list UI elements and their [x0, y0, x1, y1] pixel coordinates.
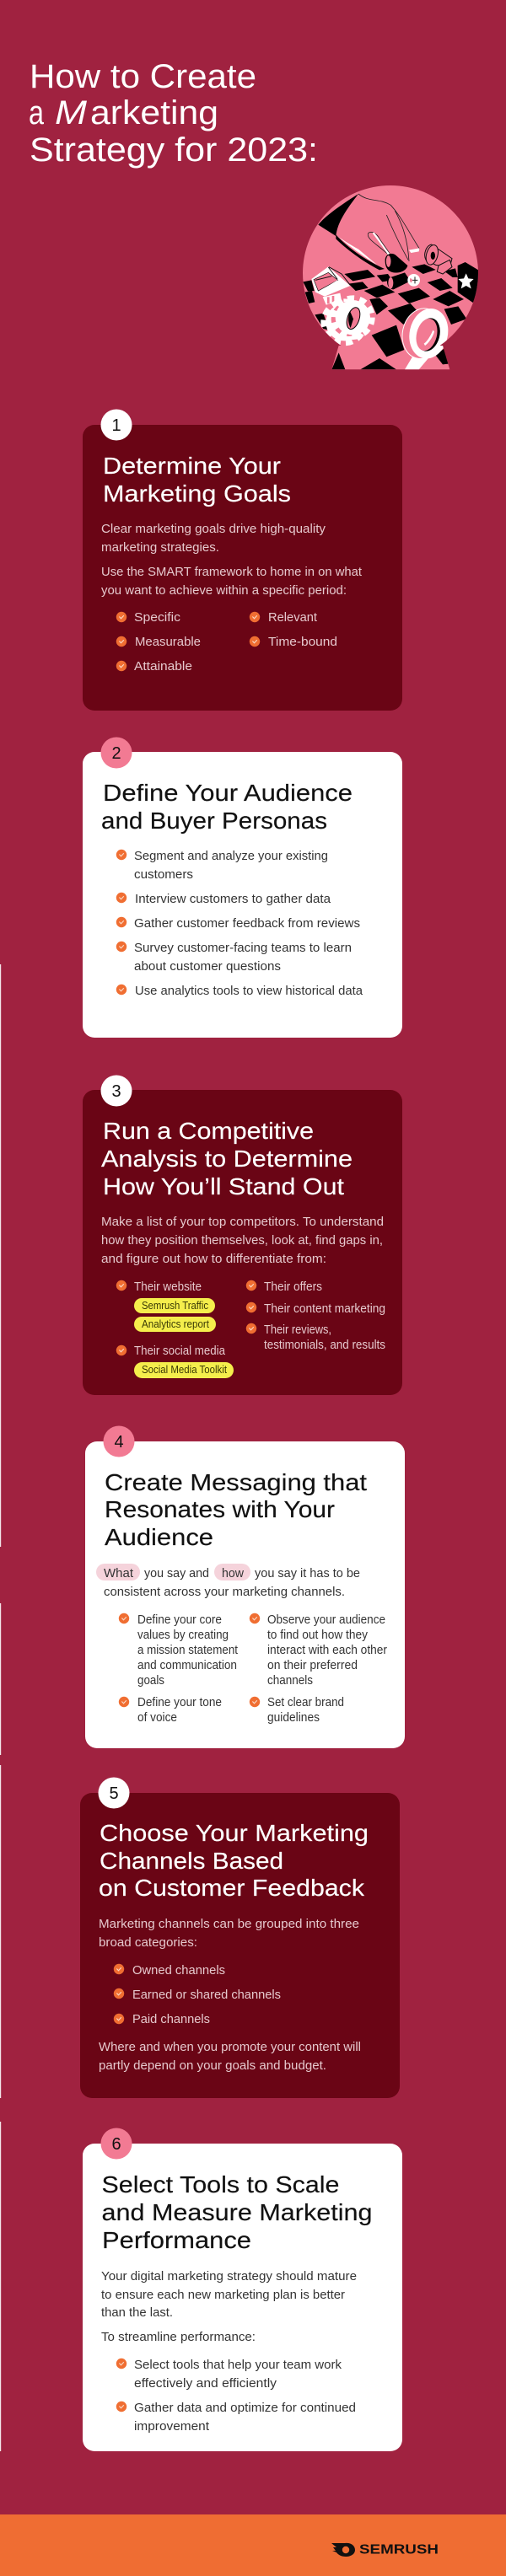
- step number 4: 4: [114, 1433, 124, 1452]
- intro text: [99, 1917, 359, 1950]
- checklist right: interact with each other: [267, 1643, 387, 1657]
- envelope: [311, 266, 350, 297]
- heading: [105, 1469, 367, 1550]
- title: M: [55, 94, 88, 131]
- step number 5: 5: [109, 1784, 119, 1803]
- closing text: Where and when you promote your content will: [99, 2040, 361, 2054]
- title: Strategy for 2023:: [30, 131, 318, 169]
- checklist right: Set clear brand: [267, 1695, 344, 1709]
- tag: Semrush Traffic: Semrush Traffic: [142, 1299, 208, 1312]
- checklist: Owned channels: [132, 1963, 225, 1978]
- step number 2: 2: [111, 744, 121, 763]
- checklist: Gather data and optimize for continued: [134, 2401, 356, 2415]
- heading: Marketing Goals: [103, 480, 291, 507]
- checklist right: testimonials, and results: [264, 1338, 385, 1352]
- checklist left: Define your tone: [137, 1695, 222, 1709]
- intro text: [101, 1215, 384, 1266]
- checklist: Earned or shared channels: [132, 1988, 281, 2002]
- checklist: Segment and analyze your existing: [134, 849, 328, 863]
- checklist: Survey customer-facing teams to learn: [134, 941, 352, 955]
- intro text: to ensure each new marketing plan is better: [101, 2288, 345, 2302]
- checklist left: goals: [137, 1673, 164, 1688]
- magnifier: [405, 357, 428, 369]
- checklist: [114, 1963, 281, 2026]
- title: arketing: [90, 94, 218, 131]
- step number 2: [101, 737, 132, 769]
- heading: [103, 453, 291, 507]
- title: a: [29, 94, 45, 131]
- icon: Semrush flame: [331, 2543, 355, 2557]
- intro text: marketing strategies.: [101, 540, 219, 555]
- step number 6: [101, 2128, 132, 2160]
- book with star: [458, 262, 479, 303]
- intro text: Make a list of your top competitors. To understand: [101, 1215, 384, 1229]
- checklist right: to find out how they: [267, 1628, 368, 1642]
- heading: How You’ll Stand Out: [103, 1173, 344, 1199]
- intro text with highlights: you say it has to be: [255, 1566, 360, 1580]
- checklist: Gather customer feedback from reviews: [134, 916, 360, 931]
- checklist: [116, 2358, 356, 2434]
- intro text with highlights: What: [104, 1566, 134, 1580]
- checklist right: [246, 1280, 385, 1352]
- intro text: Marketing channels can be grouped into three: [99, 1917, 359, 1931]
- intro text: you want to achieve within a specific period:: [101, 583, 347, 598]
- checklist: Interview customers to gather data: [135, 892, 331, 906]
- intro text with highlights: consistent across your marketing channels.: [104, 1585, 345, 1599]
- pieces: [385, 254, 407, 273]
- hand: [358, 194, 419, 261]
- checklist: effectively and efficiently: [134, 2376, 277, 2391]
- tag: Analytics report: Analytics report: [142, 1318, 209, 1330]
- panel: step 2 audience and personas: [83, 737, 402, 1038]
- heading: [101, 2171, 373, 2253]
- intro text: broad categories:: [99, 1935, 197, 1950]
- checklist left: [119, 1613, 239, 1725]
- checklist left: Define your core: [137, 1613, 222, 1627]
- panel: step 1 marketing goals: [83, 410, 402, 711]
- checklist: [116, 849, 363, 998]
- panel: step 3 competitive analysis: [83, 1076, 402, 1395]
- heading: on Customer Feedback: [99, 1875, 365, 1901]
- heading: [101, 780, 353, 834]
- intro text: [101, 522, 363, 598]
- SMART checklist: Measurable: [135, 635, 201, 649]
- SMART checklist: Specific: [134, 610, 181, 625]
- intro text with highlights: you say and: [144, 1566, 209, 1580]
- checklist: Paid channels: [132, 2012, 210, 2026]
- heading: Resonates with Your: [105, 1496, 335, 1522]
- heading: Create Messaging that: [105, 1469, 367, 1495]
- SMART checklist: Time-bound: [268, 635, 337, 649]
- checklist left: Their social media: [134, 1344, 226, 1358]
- closing text: partly depend on your goals and budget.: [99, 2058, 326, 2073]
- checklist right: Their content marketing: [264, 1301, 385, 1316]
- checklist: about customer questions: [134, 959, 281, 974]
- illustration: crystal ball with hand moving pieces on a chessboard: [303, 185, 478, 369]
- heading: and Measure Marketing: [101, 2199, 373, 2225]
- heading: Determine Your: [103, 453, 281, 479]
- heading: Audience: [105, 1524, 213, 1550]
- intro text: Use the SMART framework to home in on what: [101, 565, 363, 579]
- checklist right: Their offers: [264, 1280, 322, 1294]
- panel: step 6 tools: [83, 2128, 402, 2451]
- tag: Social Media Toolkit: Social Media Toolkit: [142, 1363, 227, 1376]
- step number 1: 1: [111, 416, 121, 435]
- step number 1: [101, 410, 132, 440]
- heading: [101, 1118, 353, 1199]
- step number 3: 3: [111, 1082, 121, 1101]
- checklist right: on their preferred: [267, 1658, 358, 1672]
- heading: Select Tools to Scale: [101, 2171, 339, 2198]
- Semrush logo: SEMRUSH: [359, 2542, 439, 2557]
- SMART checklist: Relevant: [268, 610, 318, 625]
- checklist right: [250, 1613, 387, 1725]
- step number 4: [103, 1426, 135, 1457]
- checklist: Select tools that help your team work: [134, 2358, 342, 2372]
- checklist: improvement: [134, 2419, 210, 2434]
- intro text: [101, 2269, 357, 2344]
- heading: Choose Your Marketing: [100, 1820, 369, 1846]
- heading: Analysis to Determine: [101, 1146, 353, 1172]
- closing text: [99, 2040, 361, 2073]
- heading: Define Your Audience: [103, 780, 353, 806]
- intro text: Your digital marketing strategy should mature: [101, 2269, 357, 2284]
- step number 6: 6: [111, 2135, 121, 2154]
- Semrush logo: [331, 2542, 439, 2557]
- SMART checklist: Attainable: [134, 659, 192, 674]
- heading: and Buyer Personas: [101, 808, 327, 834]
- checklist right: Their reviews,: [264, 1323, 331, 1337]
- gear: [326, 307, 353, 341]
- checklist left: [116, 1280, 226, 1358]
- intro text: To streamline performance:: [101, 2330, 256, 2344]
- footer band: [0, 2514, 506, 2576]
- checklist right: guidelines: [267, 1710, 320, 1725]
- panel: step 4 messaging: [85, 1426, 405, 1748]
- title: How to Create: [30, 58, 256, 95]
- step number 5: [98, 1777, 130, 1809]
- checklist right: channels: [267, 1673, 313, 1688]
- step number 3: [101, 1076, 132, 1106]
- checklist: customers: [134, 867, 193, 882]
- heading: Run a Competitive: [103, 1118, 314, 1144]
- sleeve: [318, 194, 358, 236]
- checklist left: of voice: [137, 1710, 177, 1725]
- checklist right: Observe your audience: [267, 1613, 385, 1627]
- intro text: and figure out how to differentiate from:: [101, 1252, 326, 1266]
- checklist left: Their website: [134, 1280, 202, 1294]
- title: [29, 58, 318, 169]
- heading: [99, 1820, 369, 1901]
- panel: step 5 marketing channels: [80, 1777, 400, 2098]
- checklist left: a mission statement: [137, 1643, 239, 1657]
- heading: Channels Based: [100, 1848, 283, 1874]
- intro text with highlights: how: [222, 1566, 244, 1580]
- intro text: how they position themselves, look at, find gaps in,: [101, 1233, 383, 1248]
- checklist left: and communication: [137, 1658, 237, 1672]
- intro text: Clear marketing goals drive high-quality: [101, 522, 326, 536]
- SMART checklist: [116, 610, 337, 674]
- checklist left: values by creating: [137, 1628, 229, 1642]
- checklist: Use analytics tools to view historical data: [135, 984, 363, 998]
- intro text: than the last.: [101, 2305, 173, 2320]
- intro text with highlights: [96, 1564, 360, 1599]
- heading: Performance: [102, 2227, 251, 2253]
